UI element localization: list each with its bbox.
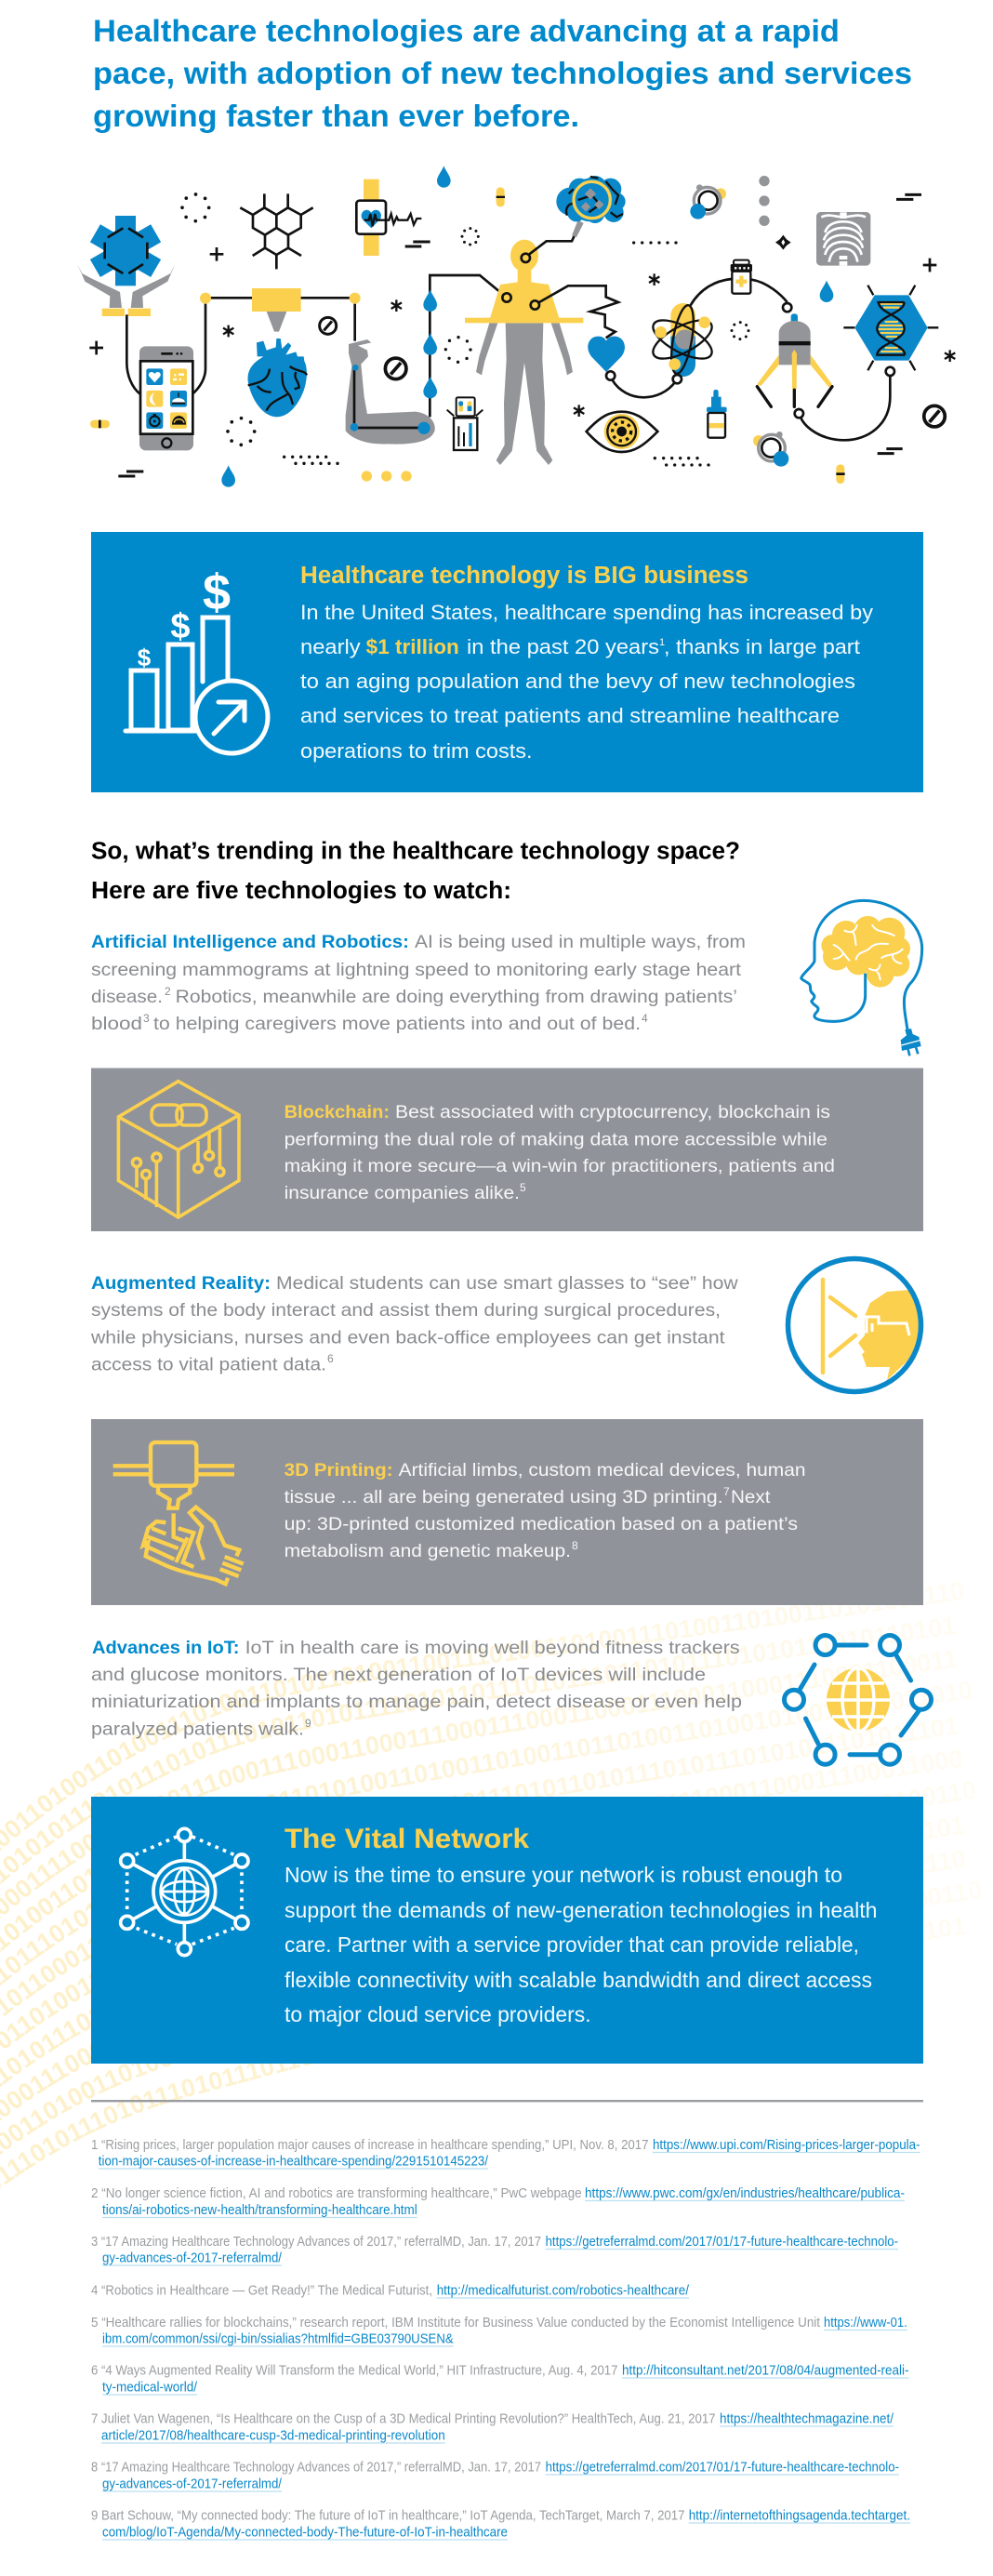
text block: augmented reality [90,1273,739,1374]
text block: artificial intelligence and robotics: 4 [642,1012,648,1025]
panel: blockchain [91,1068,923,1231]
footnote 2: 2 “No longer science fiction, AI and robotics are transforming healthcare,” PwC webpage [91,2186,582,2201]
text block: spending paragraph: , thanks in large part [664,635,860,658]
footnote 5: ibm.com/common/ssi/cgi-bin/ssialias?htmlfid=GBE03790USEN& [102,2332,454,2347]
text block: spending paragraph [300,601,873,763]
text block: vital network paragraph: support the demands of new-generation technologies in health [285,1898,878,1922]
text block: spending paragraph: In the United States, healthcare spending has increased by [300,601,873,624]
footnote 4: http://medicalfuturist.com/robotics-healthcare/ [437,2284,690,2299]
text block: advances in IoT: 9 [305,1717,311,1730]
text block: vital network paragraph: Now is the time to ensure your network is robust enough to [285,1863,842,1887]
text block: artificial intelligence and robotics: screening mammograms at lightning speed to monitoring early stage heart [91,960,742,980]
icon: rising bar chart with dollar signs: $ [203,564,231,620]
panel: 3D printing [91,1419,923,1605]
icon: blockchain cube [118,1082,239,1217]
icon: rising bar chart with dollar signs: $ [170,607,191,646]
heading: big business: Healthcare technology is BIG business [300,563,748,589]
text block: artificial intelligence and robotics: Artificial Intelligence and Robotics: [91,932,409,952]
footnote 7 [91,2412,894,2444]
text block: blockchain: 5 [520,1181,526,1194]
text block: augmented reality: Augmented Reality: [91,1273,271,1294]
text block: 3D printing: metabolism and genetic makeup. [285,1541,571,1561]
icon: rising bar chart with dollar signs: $ [138,644,152,671]
text block: spending paragraph: in the past 20 years [467,635,659,658]
footnote 1: https://www.upi.com/Rising-prices-larger-popula- [653,2138,920,2153]
footnote 6: ty-medical-world/ [102,2381,198,2396]
icon: star of life held in hands [77,216,175,316]
heading: the vital network: The Vital Network [285,1824,530,1854]
footnote 1 [91,2138,920,2170]
text block: spending paragraph: nearly [300,635,361,658]
heading: what's trending: Here are five technologies to watch: [91,878,511,904]
icon: smart glasses in circle [788,1259,922,1391]
text block: 3D printing: 8 [572,1539,578,1552]
text block: augmented reality: access to vital patient data. [91,1354,326,1374]
text block: 3D printing: 3D Printing: [285,1460,393,1481]
text block: blockchain: Blockchain: [285,1102,390,1122]
text block: spending paragraph: to an aging population and the bevy of new technologies [300,670,855,693]
icon: IoT globe network [785,1635,932,1764]
text block: blockchain: Best associated with cryptocurrency, blockchain is [395,1102,830,1122]
icon: chest x-ray [816,212,870,266]
text block: vital network paragraph: flexible connectivity with scalable bandwidth and direct access [285,1968,872,1992]
icon: DNA hexagon [843,285,938,370]
icon: rising bar chart with dollar signs [126,564,268,753]
text block: advances in IoT: and glucose monitors. The next generation of IoT devices will include [91,1665,706,1685]
text block: artificial intelligence and robotics [91,932,746,1034]
text block: artificial intelligence and robotics: Robotics, meanwhile are doing everything from drawing patients’ [176,987,737,1007]
text block: 3D printing: Artificial limbs, custom medical devices, human [399,1460,806,1481]
text block: 3D printing: tissue ... all are being generated using 3D printing. [285,1487,723,1507]
title: growing faster than ever before. [93,99,579,133]
text block: spending paragraph: and services to treat patients and streamline healthcare [300,704,840,727]
text block: 3D printing [285,1460,806,1561]
footnote 8: 8 “17 Amazing Healthcare Technology Advances of 2017,” referralMD, Jan. 17, 2017 [91,2461,541,2476]
footnote 1: 1 “Rising prices, larger population major causes of increase in healthcare spending,” UPI, Nov. 8, 2017 [91,2138,649,2153]
text block: vital network paragraph: to major cloud service providers. [285,2002,591,2026]
footnote 8: https://getreferralmd.com/2017/01/17-future-healthcare-technolo- [546,2461,899,2476]
footnote 6 [91,2364,909,2396]
footnote 2: tions/ai-robotics-new-health/transforming-healthcare.html [102,2203,417,2218]
text block: spending paragraph: 1 [659,637,665,648]
footnote 7: 7 Juliet Van Wagenen, “Is Healthcare on the Cusp of a 3D Medical Printing Revolution?” HealthTech, Aug. 21, 2017 [91,2412,716,2427]
text block: artificial intelligence and robotics: disease. [91,987,163,1007]
footnote 3 [91,2235,898,2266]
title: pace, with adoption of new technologies and services [93,56,912,90]
text block: blockchain [285,1102,835,1203]
text block: advances in IoT [91,1638,742,1740]
text block: advances in IoT: paralyzed patients walk. [91,1720,304,1740]
icon: dropper bottle [707,390,727,438]
title [93,14,912,133]
icon: lab chart with pills [447,397,483,450]
text block: spending paragraph: $1 trillion [366,635,459,658]
text block: augmented reality: Medical students can use smart glasses to “see” how [276,1273,739,1294]
footnote 2 [91,2186,905,2218]
icon: 3D printer and hand [113,1442,244,1584]
footnote 9: com/blog/IoT-Agenda/My-connected-body-The-future-of-IoT-in-healthcare [102,2526,508,2541]
footnote 2: https://www.pwc.com/gx/en/industries/healthcare/publica- [585,2186,905,2201]
footnote 7: article/2017/08/healthcare-cusp-3d-medical-printing-revolution [101,2429,445,2444]
icon: smartphone with apps [139,346,193,450]
icon: head with brain and plug [801,900,922,1056]
footnote 9: http://internetofthingsagenda.techtarget. [689,2509,910,2524]
title: Healthcare technologies are advancing at a rapid [93,14,840,48]
text block: 3D printing: 7 [723,1485,730,1498]
panel: the vital network [91,1797,923,2064]
icon: prosthetic arm [346,339,435,445]
footnote 6: http://hitconsultant.net/2017/08/04/augmented-reali- [622,2364,909,2379]
footnote 6: 6 “4 Ways Augmented Reality Will Transform the Medical World,” HIT Infrastructure, Aug. 4, 2017 [91,2364,617,2379]
text block: vital network paragraph [285,1863,878,2026]
heading: what's trending [91,839,740,904]
footnote 5: 5 “Healthcare rallies for blockchains,” research report, IBM Institute for Business Value conducted by the Economist Intelligence Unit [91,2316,820,2330]
footnote 4: 4 “Robotics in Healthcare — Get Ready!” The Medical Futurist, [91,2284,432,2299]
icon: anatomical heart [248,339,307,417]
icon: ring tool bottom [753,432,788,467]
text block: footnotes [91,2138,920,2541]
footnote 3: gy-advances-of-2017-referralmd/ [102,2251,283,2266]
text block: blockchain: insurance companies alike. [285,1183,520,1203]
icon: molecule [240,193,313,269]
text block: augmented reality: 6 [327,1352,334,1365]
text block: advances in IoT: IoT in health care is moving well beyond fitness trackers [245,1638,740,1658]
footnote 9 [91,2509,910,2541]
icon: brain under magnifier [556,176,626,237]
text block: spending paragraph: operations to trim costs. [300,739,533,763]
text block: artificial intelligence and robotics: blood [91,1014,142,1034]
footnote 8: gy-advances-of-2017-referralmd/ [102,2477,283,2492]
footnote 5: https://www-01. [824,2316,907,2330]
icon: eye [587,412,657,452]
icon: smartwatch with heart rate [356,179,421,256]
text block: advances in IoT: Advances in IoT: [92,1638,240,1658]
footnote 8 [91,2461,899,2492]
text block: augmented reality: systems of the body interact and assist them during surgical procedures, [91,1300,721,1321]
text block: vital network paragraph: care. Partner with a service provider that can provide reliable, [285,1932,859,1957]
footnote 7: https://healthtechmagazine.net/ [720,2412,894,2427]
footnote 3: 3 “17 Amazing Healthcare Technology Advances of 2017,” referralMD, Jan. 17, 2017 [91,2235,541,2250]
text block: artificial intelligence and robotics: 3 [143,1012,150,1025]
text block: artificial intelligence and robotics: to helping caregivers move patients into and out of bed. [153,1014,641,1034]
heading: what's trending: So, what’s trending in the healthcare technology space? [91,839,740,865]
text block: advances in IoT: miniaturization and implants to manage pain, detect disease or even help [91,1692,742,1712]
icon: robotic claw [757,313,832,406]
icon: 3D printer head [200,288,361,332]
text block: artificial intelligence and robotics: 2 [165,985,171,998]
footnote 4 [91,2284,690,2299]
text block: 3D printing: Next [731,1487,771,1507]
icon: heart and connector [588,337,676,397]
icon: ring tool top [690,184,726,219]
footnote 1: tion-major-causes-of-increase-in-healthcare-spending/2291510145223/ [99,2155,489,2170]
illustration: healthcare technologies left half [77,166,507,487]
footnote 3: https://getreferralmd.com/2017/01/17-future-healthcare-technolo- [546,2235,898,2250]
icon: human figure [465,240,583,465]
illustration: healthcare technologies right half [465,176,955,484]
text block: 3D printing: up: 3D-printed customized medication based on a patient’s [285,1514,798,1534]
text block: blockchain: making it more secure—a win-win for practitioners, patients and [285,1156,835,1176]
background: binary code waves [0,1583,981,2188]
icon: globe network [121,1828,248,1956]
icon: medicine bottle [731,260,752,294]
text block: blockchain: performing the dual role of making data more accessible while [285,1129,828,1149]
icon: atom [648,303,717,383]
text block: augmented reality: while physicians, nurses and even back-office employees can get instant [90,1328,725,1348]
footnote 9: 9 Bart Schouw, “My connected body: The future of IoT in healthcare,” IoT Agenda, TechTarget, March 7, 2017 [91,2509,684,2524]
panel: healthcare technology is big business [91,532,923,792]
text block: artificial intelligence and robotics: AI is being used in multiple ways, from [415,932,746,952]
footnote 5 [91,2316,907,2347]
